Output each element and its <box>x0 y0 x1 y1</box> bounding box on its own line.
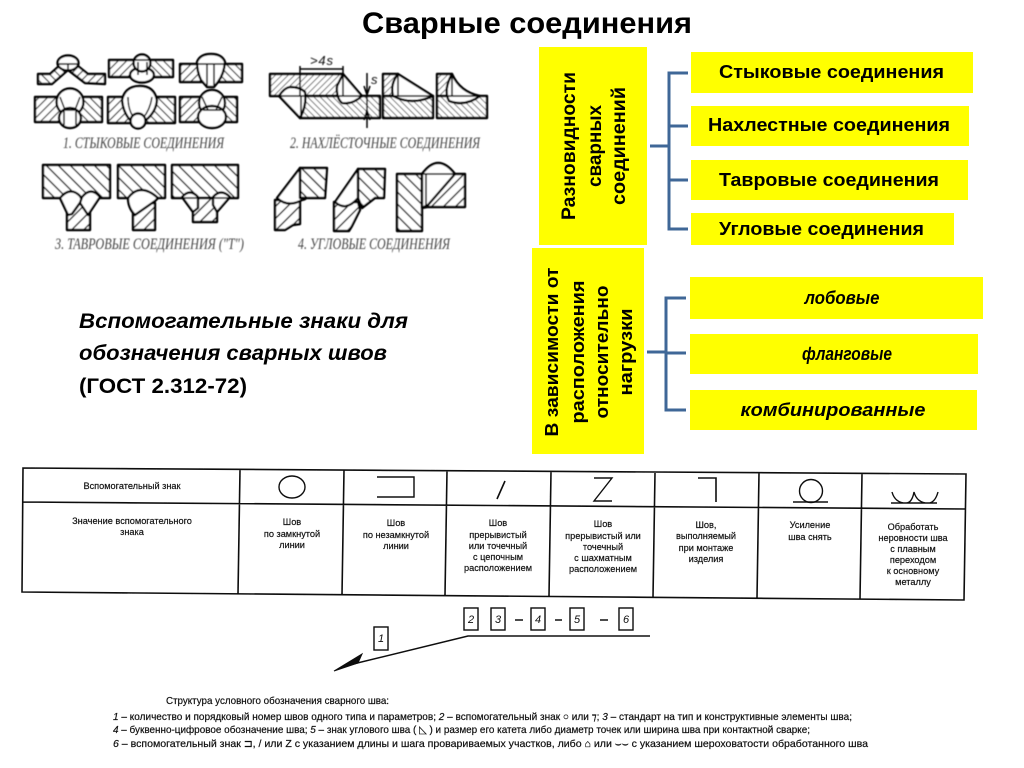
meaning: open line: по незамкнутой <box>363 530 429 540</box>
meaning: staggered: расположением <box>569 564 637 574</box>
box: frontal <box>690 277 983 319</box>
notes: designation structure: 1 – количество и порядковый номер швов одного типа и параметров; 2 – вспомогательный знак ○ или ⁊; 3 – стандарт на тип и конструктивные элементы шва; <box>113 712 852 723</box>
meaning: smooth surface <box>878 522 948 587</box>
corner joints <box>275 163 465 231</box>
meaning: chain: расположением <box>464 563 532 573</box>
meaning: chain: с цепочным <box>473 552 523 562</box>
meaning: closed line: Шов <box>283 517 301 527</box>
meaning: open line <box>363 518 429 551</box>
notes: designation structure <box>113 695 868 750</box>
leader line and arrow <box>334 636 650 671</box>
meaning: chain <box>464 518 532 573</box>
meaning: staggered: прерывистый или <box>565 531 641 541</box>
box: combined: комбинированные <box>740 400 926 420</box>
meaning: remove reinforcement <box>788 520 832 542</box>
box: combined <box>690 390 977 430</box>
meaning: chain: Шов <box>489 518 507 528</box>
row headers: Значение вспомогательного <box>72 516 192 526</box>
meaning: smooth surface: металлу <box>895 577 931 587</box>
meaning: closed line: линии <box>279 540 305 550</box>
box 2 <box>464 608 478 630</box>
meaning: closed line: по замкнутой <box>264 529 320 539</box>
sign: smooth surface <box>891 492 938 503</box>
dash <box>515 619 523 621</box>
box 4 <box>531 608 545 630</box>
dash <box>555 619 562 621</box>
meaning: smooth surface: Обработать <box>888 522 939 532</box>
sign: closed line <box>279 476 305 498</box>
heading: auxiliary signs: (ГОСТ 2.312-72) <box>79 375 247 398</box>
position heading: В зависимости от <box>541 268 562 436</box>
panel: by position relative to load <box>532 248 644 454</box>
position heading: относительно <box>591 286 612 418</box>
table grid <box>22 468 966 600</box>
box 5 <box>570 608 584 630</box>
sign: staggered <box>594 478 612 501</box>
meaning: staggered: точечный <box>583 542 623 552</box>
box 6 <box>619 608 633 630</box>
heading: auxiliary signs: обозначения сварных швов <box>79 342 387 365</box>
varieties heading: Разновидности <box>559 72 580 220</box>
lap joints caption: 2. НАХЛЁСТОЧНЫЕ СОЕДИНЕНИЯ <box>290 134 481 152</box>
tee joints caption: 3. ТАВРОВЫЕ СОЕДИНЕНИЯ ("Т") <box>54 236 244 253</box>
meaning: open line: Шов <box>387 518 405 528</box>
meaning: open line: линии <box>383 541 409 551</box>
dash <box>600 619 608 621</box>
lap joints <box>270 66 487 128</box>
sign: chain <box>497 481 505 499</box>
meaning: staggered: Шов <box>594 519 612 529</box>
butt joints caption: 1. СТЫКОВЫЕ СОЕДИНЕНИЯ <box>63 135 225 152</box>
box: flank <box>690 334 978 374</box>
row headers: Вспомогательный знак <box>83 481 182 491</box>
box: tee joints <box>691 160 968 200</box>
box 1 <box>374 627 388 650</box>
row headers: знака <box>120 527 145 537</box>
sign: assembly <box>698 478 716 502</box>
tee joints <box>43 165 238 230</box>
bracket: position <box>647 298 686 410</box>
dimension label: greater than 4s: >4s <box>310 53 334 68</box>
position heading <box>541 268 636 436</box>
meaning: chain: прерывистый <box>469 530 527 540</box>
varieties heading: соединений <box>609 87 630 205</box>
dimension label: s: s <box>371 72 378 87</box>
meaning: staggered: с шахматным <box>574 553 632 563</box>
meaning: smooth surface: к основному <box>887 566 940 576</box>
diagram: weld designation structure <box>334 608 650 671</box>
box 1: 1 <box>378 633 384 645</box>
box: frontal: лобовые <box>804 288 880 308</box>
varieties heading: сварных <box>585 105 606 187</box>
notes: designation structure: 4 – буквенно-цифровое обозначение шва; 5 – знак углового шва ( ◺ ) и размер его катета либо диаметр точек или ширина шва при контактной сварке; <box>113 724 810 736</box>
box: flank: фланговые <box>802 344 892 364</box>
table: auxiliary signs <box>22 468 966 600</box>
meaning: smooth surface: неровности шва <box>878 533 948 543</box>
box: tee joints: Тавровые соединения <box>719 169 939 190</box>
meaning: smooth surface: переходом <box>890 555 936 565</box>
heading: auxiliary signs <box>79 310 408 398</box>
varieties heading <box>559 72 630 220</box>
box 2: 2 <box>467 614 474 626</box>
meaning: assembly <box>676 520 736 564</box>
heading: auxiliary signs: Вспомогательные знаки для <box>79 310 408 333</box>
sign: remove reinforcement <box>793 480 828 502</box>
position heading: расположения <box>567 280 588 424</box>
meaning: assembly: Шов, <box>696 520 716 530</box>
meaning: assembly: выполняемый <box>676 531 736 541</box>
sign: open line <box>377 477 414 497</box>
box 3 <box>491 608 505 630</box>
box: corner joints: Угловые соединения <box>719 218 924 239</box>
row headers <box>72 481 192 537</box>
meaning: closed line <box>264 517 320 550</box>
box 6: 6 <box>623 614 630 626</box>
corner joints caption: 4. УГЛОВЫЕ СОЕДИНЕНИЯ <box>298 236 451 253</box>
box 5: 5 <box>574 614 581 626</box>
meaning: assembly: изделия <box>689 554 723 564</box>
meaning: assembly: при монтаже <box>679 543 733 553</box>
box: butt joints <box>691 52 973 93</box>
box: butt joints: Стыковые соединения <box>719 61 944 82</box>
meaning: staggered <box>565 519 641 574</box>
box 3: 3 <box>495 614 502 626</box>
meaning: remove reinforcement: шва снять <box>788 532 832 542</box>
drawing: types of welded joints <box>35 53 487 253</box>
notes: designation structure: 6 – вспомогательный знак ⊐, / или Z с указанием длины и шага провариваемых участков, либо ⌂ или ⌣⌣ с указанием шероховатости обработанного шва <box>113 738 868 750</box>
box: lap joints: Нахлестные соединения <box>708 114 950 135</box>
box: corner joints <box>691 213 954 245</box>
title: Сварные соединения <box>362 7 692 40</box>
box 4: 4 <box>535 614 541 626</box>
box: lap joints <box>691 106 969 146</box>
panel: varieties of welded joints <box>539 47 647 245</box>
butt joints <box>35 54 242 128</box>
position heading: нагрузки <box>615 308 636 396</box>
meaning: remove reinforcement: Усиление <box>790 520 830 530</box>
meaning: smooth surface: с плавным <box>890 544 936 554</box>
meaning: chain: или точечный <box>469 541 527 551</box>
notes: designation structure: Структура условного обозначения сварного шва: <box>166 695 389 707</box>
bracket: varieties <box>650 73 688 229</box>
